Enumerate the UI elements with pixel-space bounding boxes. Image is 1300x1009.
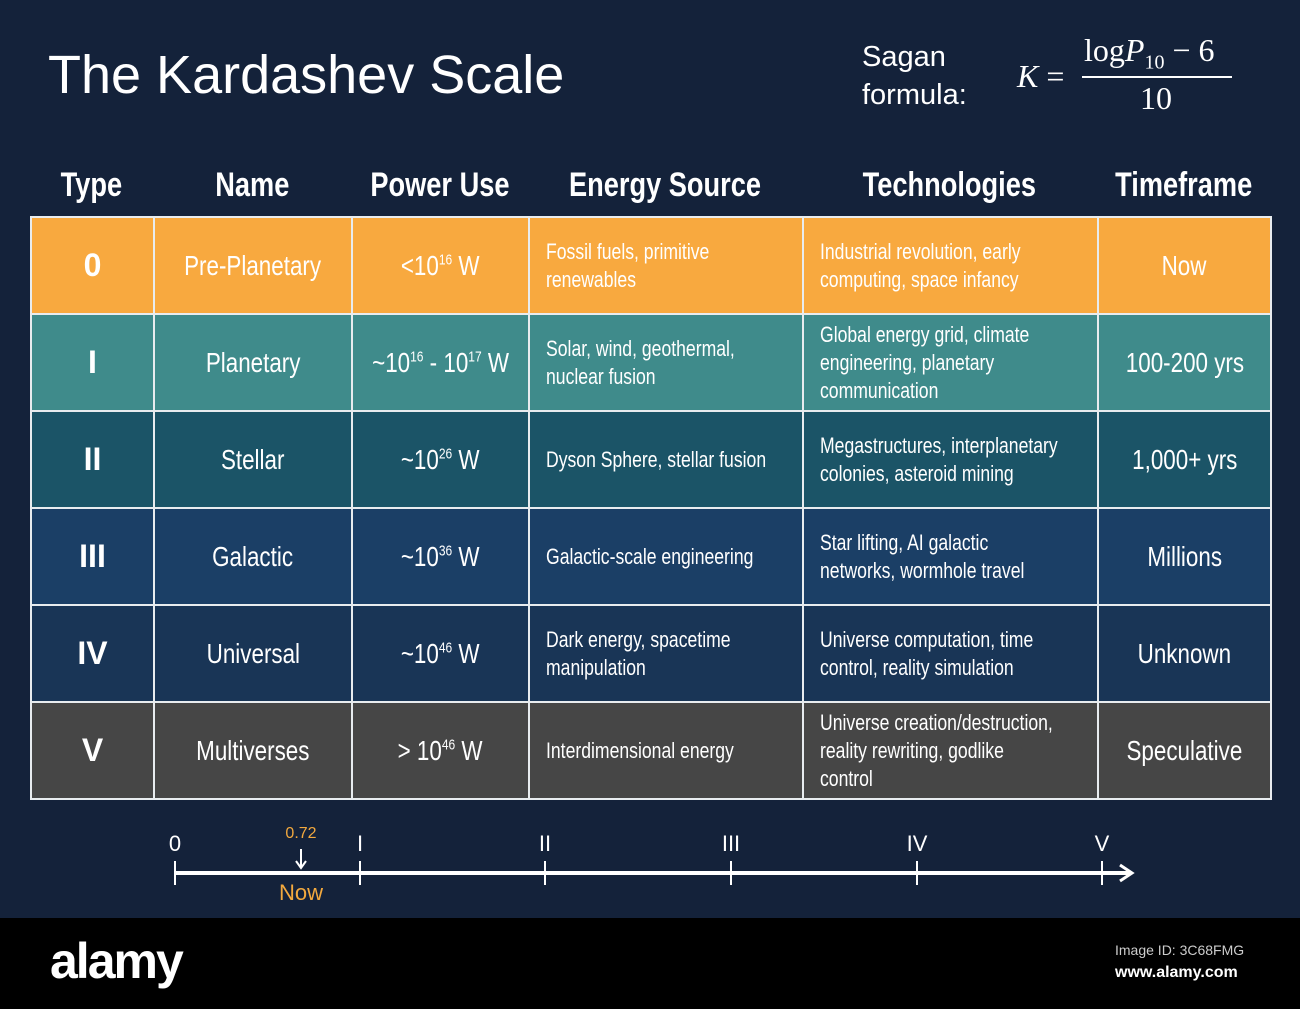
timeline: Now xyxy=(279,880,323,905)
table: manipulation xyxy=(546,654,646,680)
text: Energy Source xyxy=(569,166,761,204)
timeline: V xyxy=(1095,831,1110,856)
formula xyxy=(862,32,1232,116)
table: Universe creation/destruction, xyxy=(820,710,1053,734)
timeline: I xyxy=(357,831,363,856)
table: control, reality simulation xyxy=(820,654,1014,680)
formula: 10 xyxy=(1140,80,1172,116)
text: Name xyxy=(215,166,289,204)
footer bar: Image ID: 3C68FMG xyxy=(1115,942,1244,958)
formula: K = xyxy=(1017,58,1064,94)
table: ~1026 W xyxy=(401,444,480,474)
timeline: 0 xyxy=(169,831,181,856)
table: Speculative xyxy=(1127,734,1242,766)
table: Fossil fuels, primitive xyxy=(546,238,709,264)
text: Timeframe xyxy=(1115,166,1252,204)
table: Universal xyxy=(206,638,300,668)
table: Multiverses xyxy=(196,734,310,766)
table: Galactic xyxy=(213,540,293,572)
formula: logP10 − 6 xyxy=(1084,32,1214,73)
timeline xyxy=(169,825,1135,905)
table: Planetary xyxy=(206,346,300,378)
table: I xyxy=(88,344,97,380)
table: Dyson Sphere, stellar fusion xyxy=(546,446,766,472)
table: Dark energy, spacetime xyxy=(546,626,731,652)
column headers xyxy=(60,166,1252,204)
title: The Kardashev Scale xyxy=(48,45,564,105)
table: networks, wormhole travel xyxy=(820,558,1024,582)
table: communication xyxy=(820,378,938,402)
table: engineering, planetary xyxy=(820,350,994,374)
text: Power Use xyxy=(370,166,509,204)
table: reality rewriting, godlike xyxy=(820,738,1004,762)
table: Universe computation, time xyxy=(820,626,1033,652)
table: Millions xyxy=(1147,540,1222,572)
table: > 1046 W xyxy=(398,734,483,766)
table: renewables xyxy=(546,266,636,292)
table: Industrial revolution, early xyxy=(820,238,1021,264)
text: Type xyxy=(61,166,122,204)
table: computing, space infancy xyxy=(820,266,1019,292)
table: colonies, asteroid mining xyxy=(820,460,1014,486)
table: Interdimensional energy xyxy=(546,738,734,762)
footer bar xyxy=(0,918,1300,1009)
table: Global energy grid, climate xyxy=(820,322,1029,346)
table: Unknown xyxy=(1138,638,1231,668)
table: 1,000+ yrs xyxy=(1132,444,1237,474)
table: control xyxy=(820,766,873,790)
table: nuclear fusion xyxy=(546,364,656,388)
footer bar: alamy xyxy=(50,933,182,989)
table: Solar, wind, geothermal, xyxy=(546,336,735,360)
table: ~1016 - 1017 W xyxy=(372,346,509,378)
timeline: II xyxy=(539,831,551,856)
table: II xyxy=(84,441,101,477)
table xyxy=(30,216,1272,800)
timeline: 0.72 xyxy=(285,825,317,842)
table: <1016 W xyxy=(401,250,480,280)
footer bar: www.alamy.com xyxy=(1115,964,1238,981)
table: Pre-Planetary xyxy=(185,250,321,280)
table: V xyxy=(82,732,103,768)
table: Stellar xyxy=(221,444,285,474)
table: III xyxy=(79,538,106,574)
formula: formula: xyxy=(862,79,967,111)
table: Galactic-scale engineering xyxy=(546,544,753,568)
text: Technologies xyxy=(863,166,1036,204)
table: Now xyxy=(1162,250,1207,280)
table: 0 xyxy=(84,247,101,283)
table: IV xyxy=(77,635,108,671)
timeline: IV xyxy=(907,831,928,856)
table: ~1036 W xyxy=(401,540,480,572)
formula: Sagan xyxy=(862,41,946,73)
timeline: III xyxy=(722,831,740,856)
table: Megastructures, interplanetary xyxy=(820,432,1058,458)
table: 100-200 yrs xyxy=(1125,346,1244,378)
table: ~1046 W xyxy=(401,638,480,668)
table: Star lifting, AI galactic xyxy=(820,530,988,554)
